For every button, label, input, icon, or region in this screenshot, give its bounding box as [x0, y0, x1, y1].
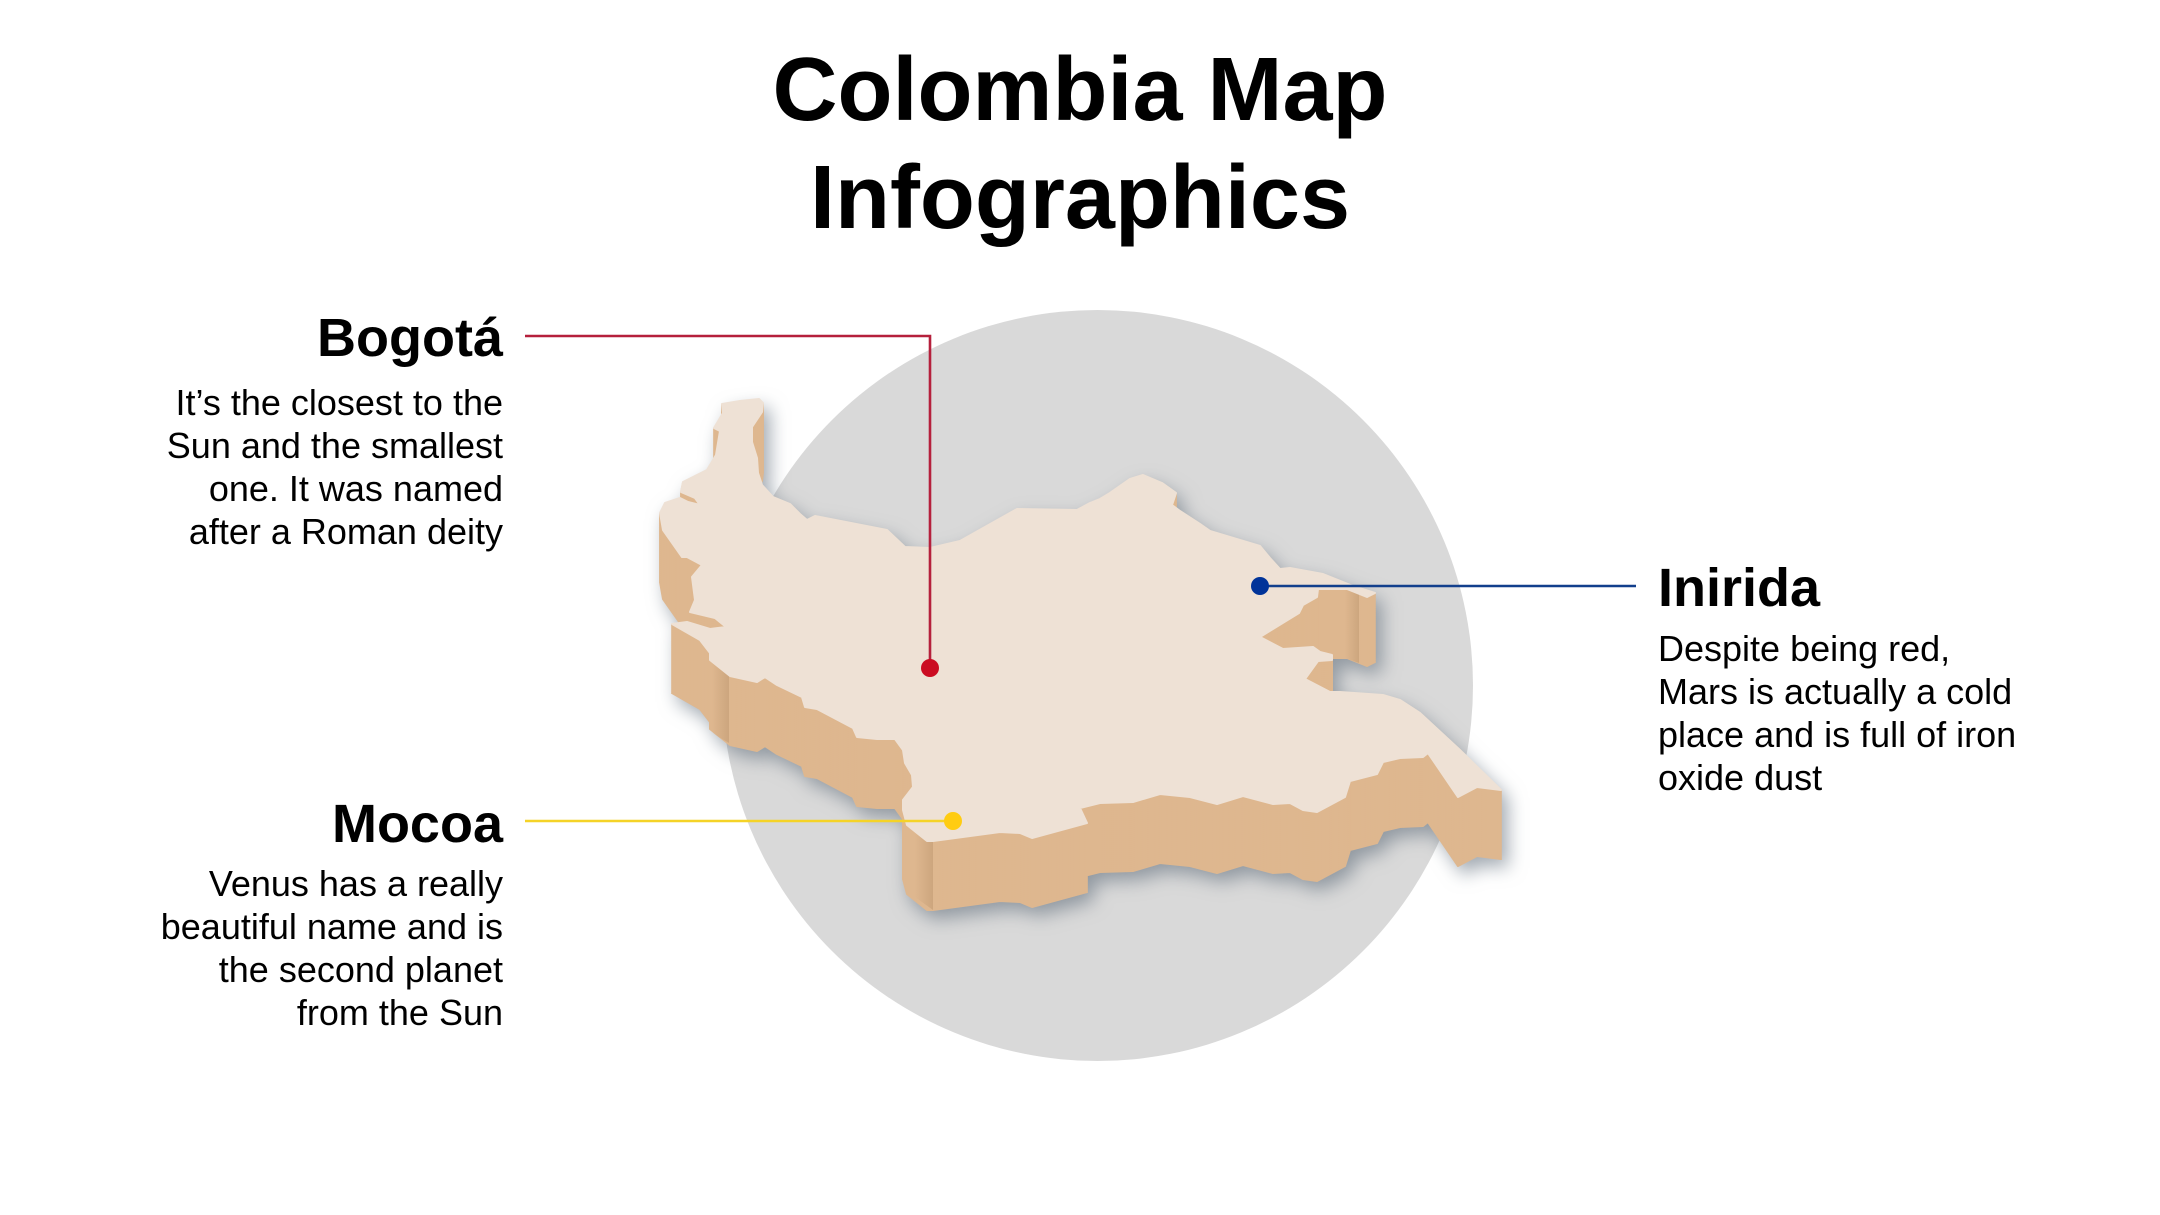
text block: Bogotá: Bogotá: [317, 308, 504, 368]
text block: Inirida: Despite being red,: [1658, 628, 1950, 669]
callout line and dot: Bogotá: [525, 336, 939, 677]
text block: Bogotá: after a Roman deity: [189, 511, 503, 552]
text block: Inirida: Mars is actually a cold: [1658, 671, 2012, 712]
callout line and dot: Mocoa: [525, 812, 962, 830]
text block: Inirida: place and is full of iron: [1658, 714, 2016, 755]
text block: Mocoa: Mocoa: [332, 794, 504, 854]
text block: Inirida: [1658, 558, 2016, 798]
title: [772, 40, 1388, 248]
map top face: [660, 399, 1501, 841]
text block: Inirida: Inirida: [1658, 558, 1821, 618]
text block: Mocoa: Venus has a really: [209, 863, 503, 904]
side fold shading: [712, 585, 1359, 910]
text block: Bogotá: [167, 308, 504, 552]
background circle: [722, 310, 1473, 1061]
text block: Inirida: oxide dust: [1658, 757, 1822, 798]
text block: Bogotá: It’s the closest to the: [175, 382, 503, 423]
map of Colombia: [660, 399, 1501, 910]
text block: Bogotá: one. It was named: [209, 468, 503, 509]
title: Infographics: [810, 148, 1350, 248]
text block: Mocoa: beautiful name and is: [161, 906, 503, 947]
title: Colombia Map: [772, 40, 1388, 140]
text block: Mocoa: from the Sun: [297, 992, 503, 1033]
text block: Mocoa: the second planet: [219, 949, 503, 990]
text block: Bogotá: Sun and the smallest: [167, 425, 503, 466]
text block: Mocoa: [161, 794, 504, 1033]
map extrusion sides with shadow: [660, 400, 1501, 910]
callout line and dot: Inirida: [1251, 577, 1636, 595]
